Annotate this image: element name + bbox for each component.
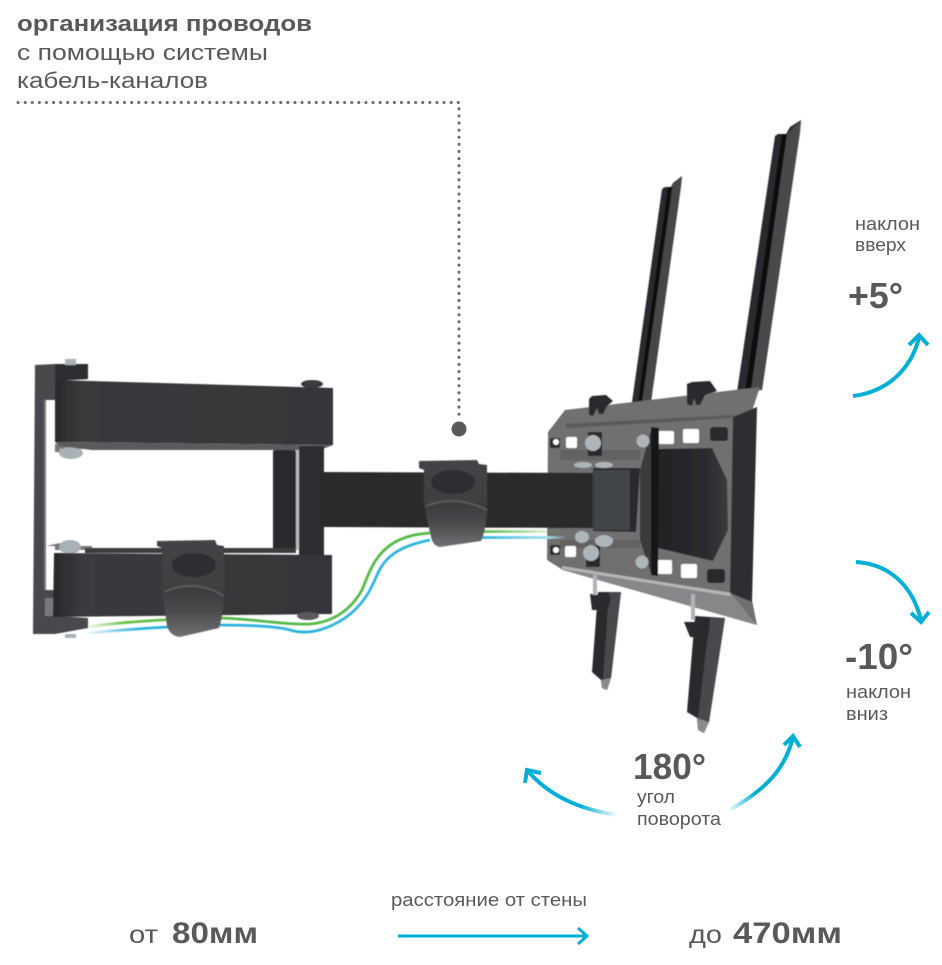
upper right rail — [737, 120, 801, 392]
green wire right part — [480, 530, 566, 533]
plate center recess — [658, 448, 728, 561]
tilt down value: -10° — [845, 636, 913, 677]
arrow: tilt up — [853, 335, 928, 396]
min distance prefix: от — [129, 921, 159, 949]
arrow: rotation right — [728, 736, 800, 811]
rail clips — [589, 381, 717, 638]
upper left rail — [632, 176, 682, 402]
plate fold shadows — [560, 415, 757, 625]
mount plate — [547, 387, 760, 625]
heading line bold: организация проводов — [17, 11, 312, 36]
wall plate — [33, 364, 92, 634]
blue wire — [87, 540, 430, 633]
rotation value: 180° — [633, 746, 706, 787]
rotation label — [633, 746, 722, 829]
distance caption: расстояние от стены — [391, 890, 587, 910]
tilt down caption: наклон — [846, 682, 911, 702]
tilt down caption second line: вниз — [846, 704, 888, 724]
tilt up caption second line: вверх — [855, 235, 906, 255]
rotation caption second line: поворота — [637, 809, 722, 829]
cable clip lower — [157, 540, 224, 637]
upper arm — [55, 380, 333, 450]
green wire — [87, 533, 430, 627]
plate slots — [565, 429, 699, 578]
wall mount arm assembly — [33, 359, 593, 638]
swivel block — [593, 468, 640, 532]
heading line three: кабель-каналов — [17, 68, 208, 93]
dotted leader line — [18, 102, 466, 436]
middle arm — [320, 472, 593, 528]
arrow: rotation left — [525, 770, 618, 815]
arrow: tilt down — [856, 562, 929, 622]
tv bracket — [547, 120, 801, 733]
vertical bracket — [640, 427, 659, 576]
bolts — [574, 434, 695, 620]
distance from wall row — [129, 890, 842, 950]
arrow: distance — [398, 928, 587, 944]
left holes — [553, 439, 559, 553]
lower arm — [53, 548, 332, 620]
tilt up value: +5° — [848, 275, 903, 316]
tilt down label — [845, 636, 913, 724]
min distance value: 80мм — [172, 917, 258, 950]
screws on wall plate — [59, 359, 83, 638]
plate side flank — [730, 407, 757, 602]
max distance value: 470мм — [733, 917, 842, 950]
lower left rail — [592, 592, 621, 690]
blue wire right part — [480, 536, 566, 539]
lower right rail — [687, 616, 725, 733]
rotation caption: угол — [637, 787, 675, 807]
heading line two: с помощью системы — [17, 40, 268, 65]
max distance prefix: до — [689, 921, 722, 949]
tilt up label — [848, 214, 920, 316]
tilt up caption: наклон — [855, 214, 920, 234]
cable clip upper — [419, 460, 487, 547]
dark slots — [550, 427, 728, 583]
heading: cable management — [17, 11, 312, 93]
pivot cylinders — [273, 446, 324, 556]
